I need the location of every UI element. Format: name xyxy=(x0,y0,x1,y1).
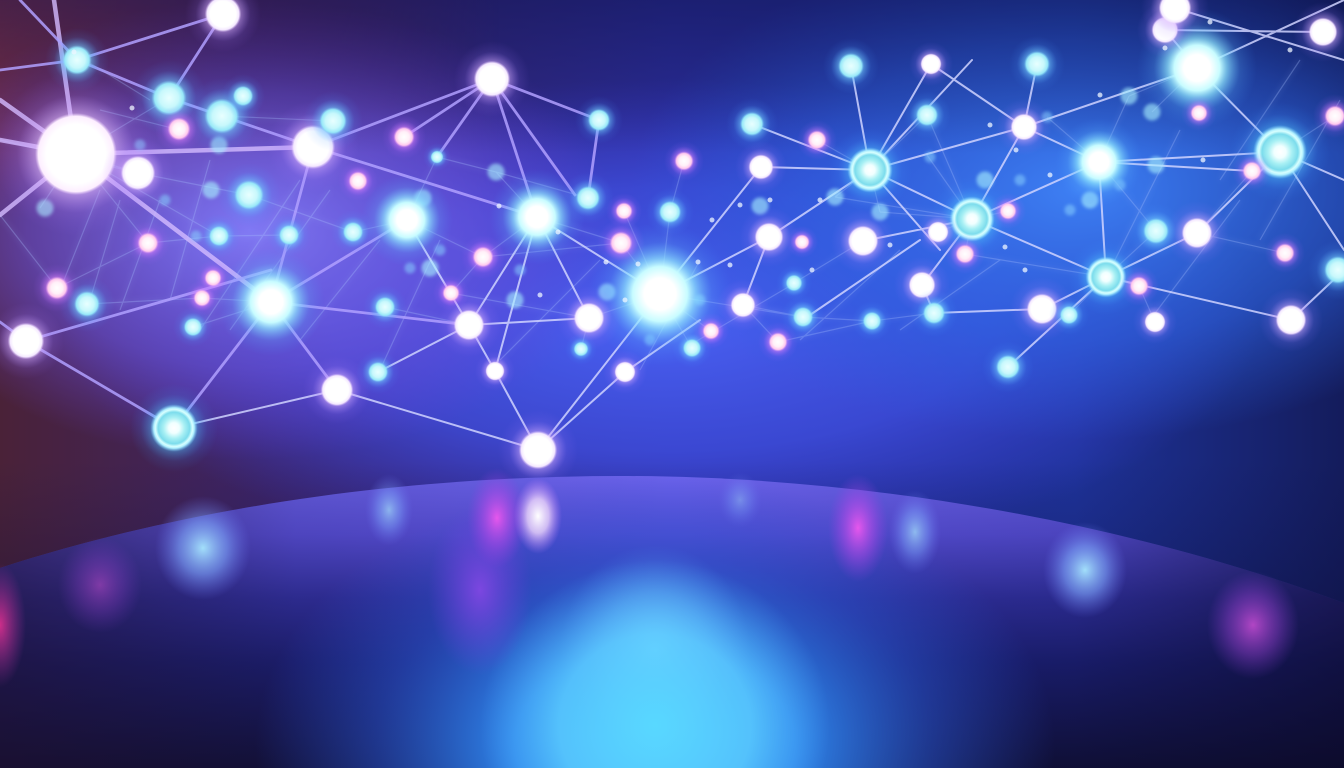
white nodes xyxy=(0,0,1344,490)
reflection: magenta and white centre xyxy=(467,468,562,568)
tiny white connector dots xyxy=(74,22,1290,300)
reflection: violet left xyxy=(58,537,142,633)
reflection: pale blue left xyxy=(155,496,251,600)
network faint background web xyxy=(0,60,1340,370)
floor edge shading xyxy=(0,476,1344,768)
reflection: blue near centre-left xyxy=(365,474,413,546)
pink nodes xyxy=(33,94,1344,362)
network nodes xyxy=(0,0,1344,490)
reflection: pink right of centre xyxy=(828,474,888,582)
background gradient xyxy=(0,0,1344,603)
central cyan reflection xyxy=(255,476,1055,768)
reflection: violet column below magenta xyxy=(428,505,532,675)
reflection: small blue xyxy=(718,472,762,528)
reflective curved surface xyxy=(0,468,1344,768)
blurred bokeh nodes xyxy=(45,96,1156,340)
reflection: pale blue right of centre xyxy=(889,490,941,574)
hub node: large white left xyxy=(0,72,158,236)
network main connection lines xyxy=(0,0,1344,450)
reflection: violet far right xyxy=(1207,571,1299,679)
hub nodes: major glowing xyxy=(130,8,1330,472)
cyan nodes xyxy=(45,28,1344,394)
reflection: magenta left edge xyxy=(0,563,26,687)
reflection: cyan right xyxy=(1043,522,1127,618)
